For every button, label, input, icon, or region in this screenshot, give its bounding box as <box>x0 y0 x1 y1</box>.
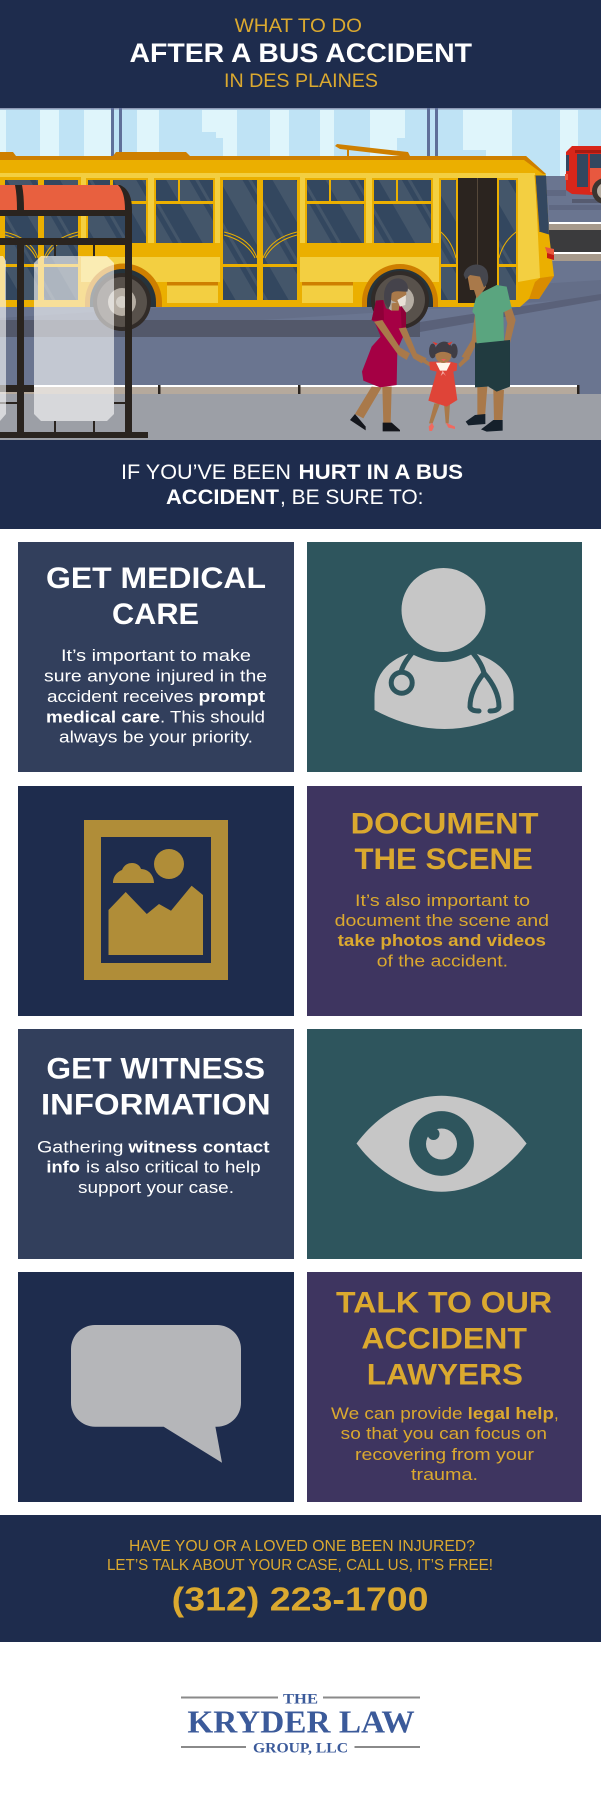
panel: eye icon <box>307 1029 582 1259</box>
girl <box>420 341 470 431</box>
icon: framed picture <box>84 820 228 980</box>
man <box>462 265 516 432</box>
header band <box>0 0 601 108</box>
body text: . This should <box>160 708 265 727</box>
call to action text <box>107 1538 493 1574</box>
heading: TALK TO OUR <box>336 1287 552 1320</box>
body text: recovering from your <box>355 1445 534 1464</box>
red bus in distance <box>565 146 601 204</box>
heading: DOCUMENT <box>351 807 538 840</box>
heading: LAWYERS <box>367 1359 523 1392</box>
body text: sure anyone injured in the <box>44 667 267 686</box>
body text <box>44 646 267 747</box>
lower panels <box>167 282 353 303</box>
body text: info <box>46 1158 80 1177</box>
panel: get witness information <box>18 1029 294 1259</box>
heading: GET MEDICAL <box>46 562 266 595</box>
heading <box>351 807 538 876</box>
yellow bus <box>0 144 554 331</box>
title line 3: IN DES PLAINES <box>224 70 378 92</box>
call to action text: LET’S TALK ABOUT YOUR CASE, CALL US, IT’S FREE! <box>107 1557 493 1574</box>
body text: legal help <box>468 1404 554 1423</box>
body text: of the accident. <box>377 952 508 971</box>
intro text: IF YOU’VE BEEN <box>121 460 291 484</box>
woman <box>350 278 427 431</box>
family of three <box>350 265 516 432</box>
sky and skyline <box>0 108 601 176</box>
heading <box>41 1052 271 1121</box>
body text: Gathering <box>37 1138 123 1157</box>
heading: INFORMATION <box>41 1088 271 1121</box>
body text: so that you can focus on <box>341 1424 547 1443</box>
heading: CARE <box>112 598 199 631</box>
logo: the kryder law group <box>181 1691 420 1757</box>
panel: picture icon <box>18 786 294 1016</box>
sidewalk and curb <box>0 385 601 440</box>
intro text: ACCIDENT <box>166 485 279 509</box>
road <box>0 176 601 390</box>
body text: prompt <box>198 687 265 706</box>
logo: the kryder law group: GROUP, LLC <box>253 1741 348 1757</box>
icon: doctor with stethoscope <box>374 568 514 729</box>
body text: always be your priority. <box>59 728 253 747</box>
body text: We can provide <box>331 1404 463 1423</box>
bus windows <box>0 177 518 307</box>
body text: trauma. <box>411 1465 478 1484</box>
icon: eye <box>356 1096 527 1192</box>
intro text <box>121 460 463 509</box>
panel: document the scene <box>307 786 582 1016</box>
body text: is also critical to help <box>86 1158 261 1177</box>
title line 2: AFTER A BUS ACCIDENT <box>130 38 472 68</box>
body text: document the scene and <box>335 911 549 930</box>
body text: accident receives <box>47 687 194 706</box>
panel: doctor icon <box>307 542 582 772</box>
phone number: (312) 223-1700 <box>172 1581 428 1618</box>
body text: It’s also important to <box>355 891 530 910</box>
body text: , <box>554 1404 559 1423</box>
body text: It’s important to make <box>61 646 251 665</box>
body text <box>331 1404 559 1484</box>
intro text: , BE SURE TO: <box>280 485 424 509</box>
call to action text: HAVE YOU OR A LOVED ONE BEEN INJURED? <box>129 1538 475 1555</box>
intro text: HURT IN A BUS <box>298 460 463 484</box>
body text: take photos and videos <box>338 931 546 950</box>
heading: ACCIDENT <box>361 1323 527 1356</box>
heading <box>336 1287 552 1392</box>
panel: speech bubble icon <box>18 1272 294 1502</box>
body text <box>37 1138 270 1197</box>
title line 1: WHAT TO DO <box>235 15 362 37</box>
wheels <box>85 264 438 331</box>
heading: THE SCENE <box>354 843 533 876</box>
panel: get medical care <box>18 542 294 772</box>
logo: the kryder law group: KRYDER LAW <box>187 1704 415 1740</box>
illustration: bus stop scene <box>0 108 601 440</box>
footer call to action <box>0 1515 601 1642</box>
glass panels <box>0 256 114 421</box>
logo: the kryder law group: THE <box>283 1691 318 1707</box>
body text: support your case. <box>78 1178 234 1197</box>
heading <box>46 562 266 631</box>
body text: medical care <box>46 708 160 727</box>
intro band <box>0 440 601 529</box>
body text <box>335 891 549 971</box>
icon: speech bubble <box>71 1325 241 1463</box>
body text: witness contact <box>127 1138 270 1157</box>
heading: GET WITNESS <box>46 1052 265 1085</box>
panel: talk to our accident lawyers <box>307 1272 582 1502</box>
bus shelter <box>0 185 148 438</box>
